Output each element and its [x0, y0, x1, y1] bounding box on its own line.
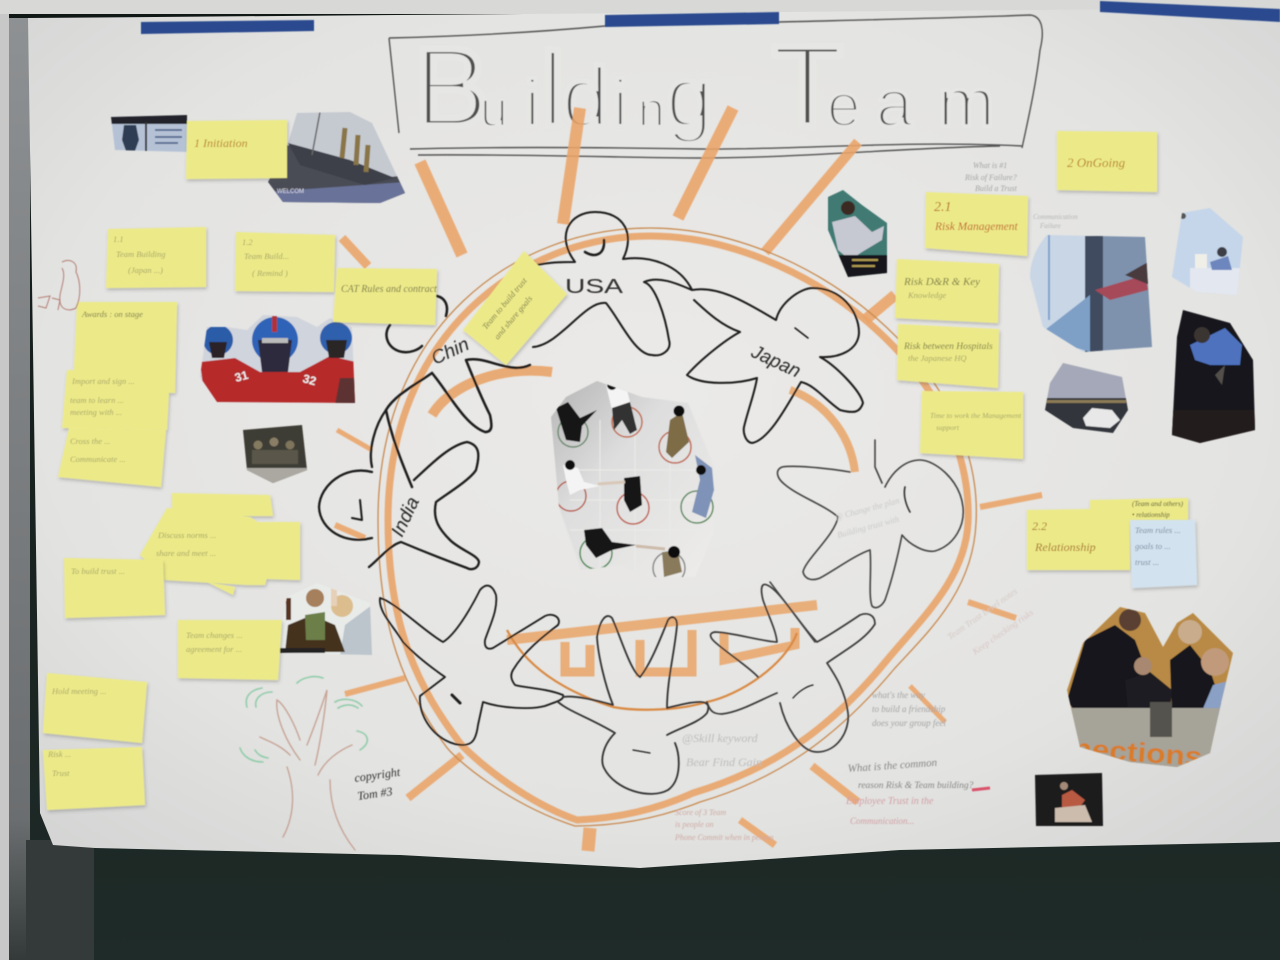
photo: football players: 32	[301, 371, 318, 388]
note: 2.2 Relationship	[1027, 498, 1188, 570]
note: CAT rules: CAT Rules and contract	[341, 284, 437, 295]
note: 2 OnGoing	[1057, 131, 1157, 192]
note: 2.2 Relationship: (Team and others)	[1132, 500, 1184, 508]
note: 1.1 team building: Team Building	[116, 249, 166, 259]
note: Risk 1: Knowledge	[907, 290, 946, 300]
title: Building Team: e	[827, 72, 860, 139]
figure: bottom left	[380, 586, 563, 745]
figure labels: Japan	[747, 341, 804, 382]
photo: football players: 31	[233, 368, 250, 385]
handwritten annotations: copyright	[353, 765, 402, 785]
note: lower left one	[64, 558, 165, 618]
note: central stack: Discuss norms ...	[157, 530, 216, 540]
note: lower centre	[178, 620, 282, 680]
photo: football players	[198, 313, 358, 408]
photo: group of four	[279, 588, 372, 656]
note: blue note: trust ...	[1135, 557, 1159, 567]
handwritten annotations: reason Risk & Team building?	[858, 781, 974, 791]
handwritten annotations	[353, 161, 1078, 842]
note: Risk 2: the Japanese HQ	[908, 353, 967, 363]
note: blue note	[1130, 520, 1197, 588]
title: Building Team: n	[638, 84, 665, 137]
handwritten annotations: Failure	[1039, 222, 1061, 230]
note: 2.1 Risk Management	[925, 192, 1028, 256]
handwritten annotations: Build a Trust	[975, 184, 1018, 193]
note: 2 OnGoing: 2 OnGoing	[1067, 155, 1126, 170]
note: 1.1 team building: 1.1	[113, 234, 124, 244]
handwritten annotations: What is #1	[973, 161, 1007, 170]
handwritten annotations: @Skill keyword	[682, 731, 759, 745]
note: central stack: share and meet ...	[156, 548, 216, 558]
photo: people cheering	[1035, 773, 1103, 826]
note: stack of awards notes: team to learn ...	[70, 395, 124, 405]
note: stack of awards notes: Cross the ...	[70, 436, 111, 446]
photo: man at a desk	[1172, 208, 1243, 295]
photo: dark group	[240, 424, 310, 486]
photo: business group with orange title	[1066, 606, 1234, 768]
note: stack of awards notes: meeting with ...	[70, 407, 122, 417]
blue mounting bars	[141, 1, 1280, 34]
note: 2.2 Relationship: 2.2	[1032, 519, 1047, 533]
note: rotated centre note: and share goals	[492, 293, 535, 341]
note: Risk 3	[920, 391, 1023, 459]
note: 1.2 team building: ( Remind )	[252, 268, 288, 278]
centre photo: people shaking hands	[545, 380, 720, 584]
handwritten annotations: Communication...	[850, 816, 914, 826]
photo: blue office scene	[1030, 234, 1152, 353]
note: lower centre: Team changes ...	[186, 630, 243, 640]
note: Risk 2: Risk between Hospitals	[903, 342, 993, 352]
note: 2.1 Risk Management: 2.1	[934, 200, 952, 215]
handwritten annotations: to build a friendship	[872, 704, 946, 714]
note: stack of awards notes: Import and sign ...	[71, 376, 135, 386]
handwritten annotations: Bear Find Gain	[686, 755, 762, 769]
note: 1.2 team building	[235, 232, 335, 292]
note: blue note: Team rules ...	[1135, 525, 1181, 535]
handwritten annotations: Building trust with	[836, 514, 900, 540]
note: Risk 2	[897, 324, 999, 388]
note: lower left three: Trust	[52, 768, 70, 778]
note: Risk 3: support	[936, 423, 960, 432]
handwritten annotations: Team Trust Level notes	[945, 586, 1019, 642]
figure: India	[319, 410, 479, 569]
note: 1.1 team building	[106, 227, 206, 288]
figure: USA	[525, 212, 692, 355]
title: Building Team: g	[666, 50, 736, 144]
note: 2.2 Relationship: Relationship	[1034, 540, 1096, 554]
title: Building Team: m	[938, 65, 995, 141]
figure: bottom right	[707, 584, 875, 752]
note: Risk 3: Time to work the Management	[930, 411, 1022, 420]
handwritten annotations: What is the common	[847, 757, 938, 775]
note: rotated centre note: Team to build trust	[480, 275, 529, 331]
figure labels: India	[387, 494, 424, 540]
photo: stressed man in dark	[1170, 308, 1260, 446]
handwritten annotations: Risk of Failure?	[964, 173, 1017, 182]
note: 1.2 team building: Team Build...	[244, 251, 289, 261]
note: Risk 1	[895, 259, 999, 323]
title: Building Team	[389, 15, 1042, 158]
sticky notes: left column	[43, 120, 335, 810]
handwritten annotations: Phone Commit when in person	[674, 833, 774, 842]
figure labels: Chin	[428, 334, 473, 370]
figure: bottom centre	[558, 616, 708, 794]
note: lower left two: Hold meeting ...	[51, 686, 107, 696]
handwritten annotations: @ Change the plan	[834, 495, 900, 522]
doodle: dog	[38, 260, 80, 310]
note: CAT rules	[333, 268, 437, 325]
handwritten annotations: Communication	[1033, 213, 1078, 221]
note: lower left three	[43, 747, 145, 810]
team figures	[319, 212, 963, 794]
figure: China	[386, 296, 530, 487]
figure: Japan	[687, 288, 863, 443]
note: lower centre: agreement for ...	[186, 644, 242, 654]
title: Building Team: l	[541, 31, 565, 149]
note: 1.1 team building: (Japan ...)	[128, 265, 163, 275]
handwritten annotations: Tom #3	[356, 784, 393, 803]
title: Building Team: i	[525, 66, 540, 140]
photo: Titanic ship: WELCOM	[277, 189, 304, 195]
sticky notes: centre	[333, 251, 567, 365]
figure labels	[387, 276, 804, 540]
figure: right	[777, 440, 963, 608]
title: Building Team: u	[480, 81, 508, 137]
orange sun rays	[335, 108, 1042, 851]
note: stack of awards notes	[58, 302, 177, 487]
photo: business group with orange title: nections	[1072, 733, 1203, 772]
note: lower left two	[43, 673, 147, 743]
crown under the figures	[507, 605, 817, 640]
note: 2.2 Relationship: • relationship	[1132, 511, 1170, 519]
note: 1 Initiation: 1 Initiation	[194, 136, 248, 150]
photo: person at a sign	[110, 115, 188, 153]
handwritten annotations: does your group feel	[872, 718, 946, 728]
note: stack of awards notes: Communicate ...	[70, 454, 126, 464]
note: stack of awards notes: Awards : on stage	[81, 309, 143, 319]
note: 1.2 team building: 1.2	[242, 237, 253, 247]
title: Building Team: a	[876, 66, 913, 140]
title: Building Team: T	[772, 21, 843, 151]
orange ring	[378, 228, 976, 826]
photo: man with suspenders	[825, 188, 890, 280]
note: 1 Initiation	[186, 120, 287, 179]
handwritten annotations: is people on	[675, 820, 714, 829]
doodle: tree	[240, 677, 367, 850]
note: central stack	[140, 493, 300, 595]
note: 2.1 Risk Management: Risk Management	[934, 221, 1019, 233]
figure labels: USA	[565, 276, 624, 298]
note: rotated centre note	[463, 251, 567, 365]
note: Risk 1: Risk D&R & Key	[903, 276, 980, 288]
handwritten annotations: Employee Trust in the	[845, 796, 934, 807]
title: Building Team: B	[414, 25, 489, 150]
title: Building Team: d	[562, 50, 609, 144]
photo: Titanic ship	[265, 110, 410, 205]
sticky notes: right column	[895, 131, 1197, 588]
title: Building Team: i	[613, 66, 628, 140]
note: blue note: goals to ...	[1135, 541, 1171, 551]
photo: crashed cars	[1044, 362, 1129, 434]
handwritten annotations: Keep checking risks	[970, 607, 1036, 657]
handwritten annotations: what's the way	[872, 690, 925, 700]
handwritten annotations: Score of 3 Team	[675, 808, 726, 817]
note: lower left one: To build trust ...	[71, 566, 125, 576]
note: lower left three: Risk ...	[47, 749, 71, 759]
